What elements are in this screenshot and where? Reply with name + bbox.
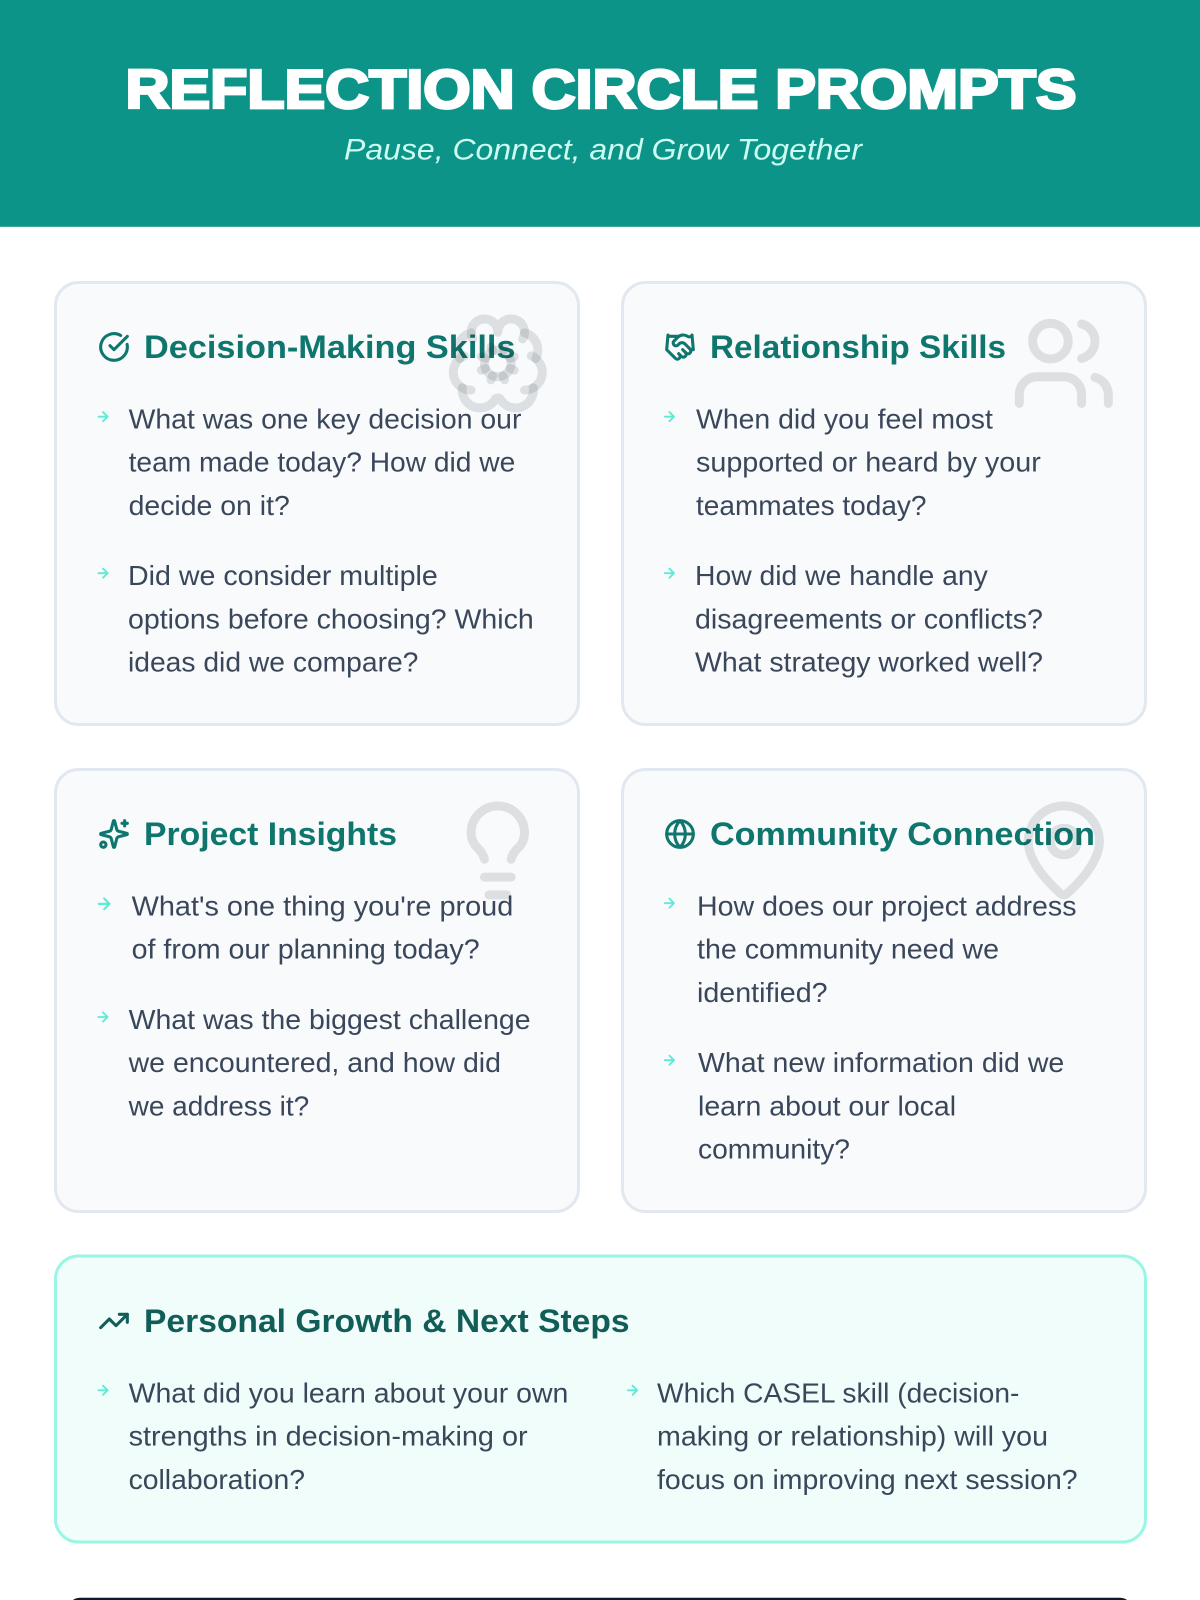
prompt text <box>129 404 521 521</box>
panel: personal growth and next steps <box>56 1256 1146 1542</box>
heading: personal growth and next steps: Personal Growth & Next Steps <box>144 1303 630 1339</box>
prompt text: making or relationship) will you <box>657 1421 1048 1452</box>
icon: sparkles <box>101 821 127 847</box>
prompt text: How does our project address <box>697 890 1076 922</box>
prompt text <box>129 1378 568 1495</box>
panel: decision-making skills <box>56 282 578 724</box>
prompt text: decide on it? <box>129 490 290 521</box>
bullet arrow <box>98 569 108 578</box>
prompt text: ideas did we compare? <box>128 646 418 678</box>
heading: project insights: Project Insights <box>144 816 397 852</box>
subtitle: Pause, Connect, and Grow Together <box>344 134 863 166</box>
icon: trending up <box>101 1314 127 1328</box>
heading: decision-making skills: Decision-Making Skills <box>144 329 516 365</box>
prompt text: teammates today? <box>696 490 926 521</box>
prompt text: What was one key decision our <box>129 404 521 434</box>
prompt text: How did we handle any <box>695 560 988 591</box>
prompt text: community? <box>698 1134 850 1164</box>
prompt text: team made today? How did we <box>129 447 515 478</box>
panel: project insights <box>56 770 578 1212</box>
prompt text: What did you learn about your own <box>129 1378 568 1408</box>
prompt text: When did you feel most <box>696 404 993 434</box>
prompt text: disagreements or conflicts? <box>695 603 1043 634</box>
prompt text: What was the biggest challenge <box>129 1004 531 1035</box>
bullet arrow <box>665 1056 674 1065</box>
prompt text <box>128 1004 531 1121</box>
prompt text <box>128 560 534 678</box>
prompt text <box>698 1047 1064 1164</box>
prompt text: Which CASEL skill (decision- <box>657 1378 1019 1408</box>
prompt text <box>697 890 1076 1008</box>
prompt text <box>132 890 513 965</box>
prompt text: collaboration? <box>129 1464 305 1495</box>
prompt text: options before choosing? Which <box>128 603 534 634</box>
icon: lightbulb watermark <box>471 806 524 895</box>
icon: handshake <box>667 335 693 359</box>
bullet arrow <box>665 569 674 578</box>
prompt text: learn about our local <box>698 1090 956 1121</box>
prompt text: focus on improving next session? <box>657 1464 1078 1495</box>
bullet arrow <box>98 1386 108 1395</box>
prompt text: What's one thing you're proud <box>132 890 513 922</box>
prompt text: the community need we <box>697 934 999 965</box>
prompt text <box>695 560 1043 678</box>
prompt text: of from our planning today? <box>132 934 480 965</box>
bullet arrow <box>665 899 674 908</box>
icon: users watermark <box>1019 323 1108 403</box>
bullet arrow <box>98 1012 108 1022</box>
prompt text <box>657 1378 1078 1495</box>
prompt text: identified? <box>697 977 828 1008</box>
icon: map pin watermark <box>1028 806 1099 895</box>
header banner <box>0 0 1200 227</box>
icon: brain cog watermark <box>453 319 542 408</box>
prompt text: What new information did we <box>698 1047 1064 1078</box>
bullet arrow <box>665 412 674 421</box>
panel: relationship skills <box>622 282 1146 724</box>
bullet arrow <box>98 412 108 421</box>
bullet arrow <box>628 1386 637 1395</box>
icon: globe <box>667 821 693 847</box>
prompt text: strengths in decision-making or <box>129 1421 528 1452</box>
title: REFLECTION CIRCLE PROMPTS <box>126 58 1076 120</box>
prompt text <box>696 404 1041 521</box>
prompt text: we encountered, and how did <box>128 1047 501 1078</box>
panel: community connection <box>622 770 1146 1212</box>
prompt text: Did we consider multiple <box>128 560 438 591</box>
footer bar <box>68 1598 1132 1600</box>
prompt text: supported or heard by your <box>696 447 1041 478</box>
prompt text: we address it? <box>128 1090 309 1121</box>
icon: circle check <box>101 334 127 360</box>
heading: relationship skills: Relationship Skills <box>710 329 1006 365</box>
prompt text: What strategy worked well? <box>695 646 1043 678</box>
bullet arrow <box>99 899 110 909</box>
heading: community connection: Community Connection <box>710 816 1095 852</box>
